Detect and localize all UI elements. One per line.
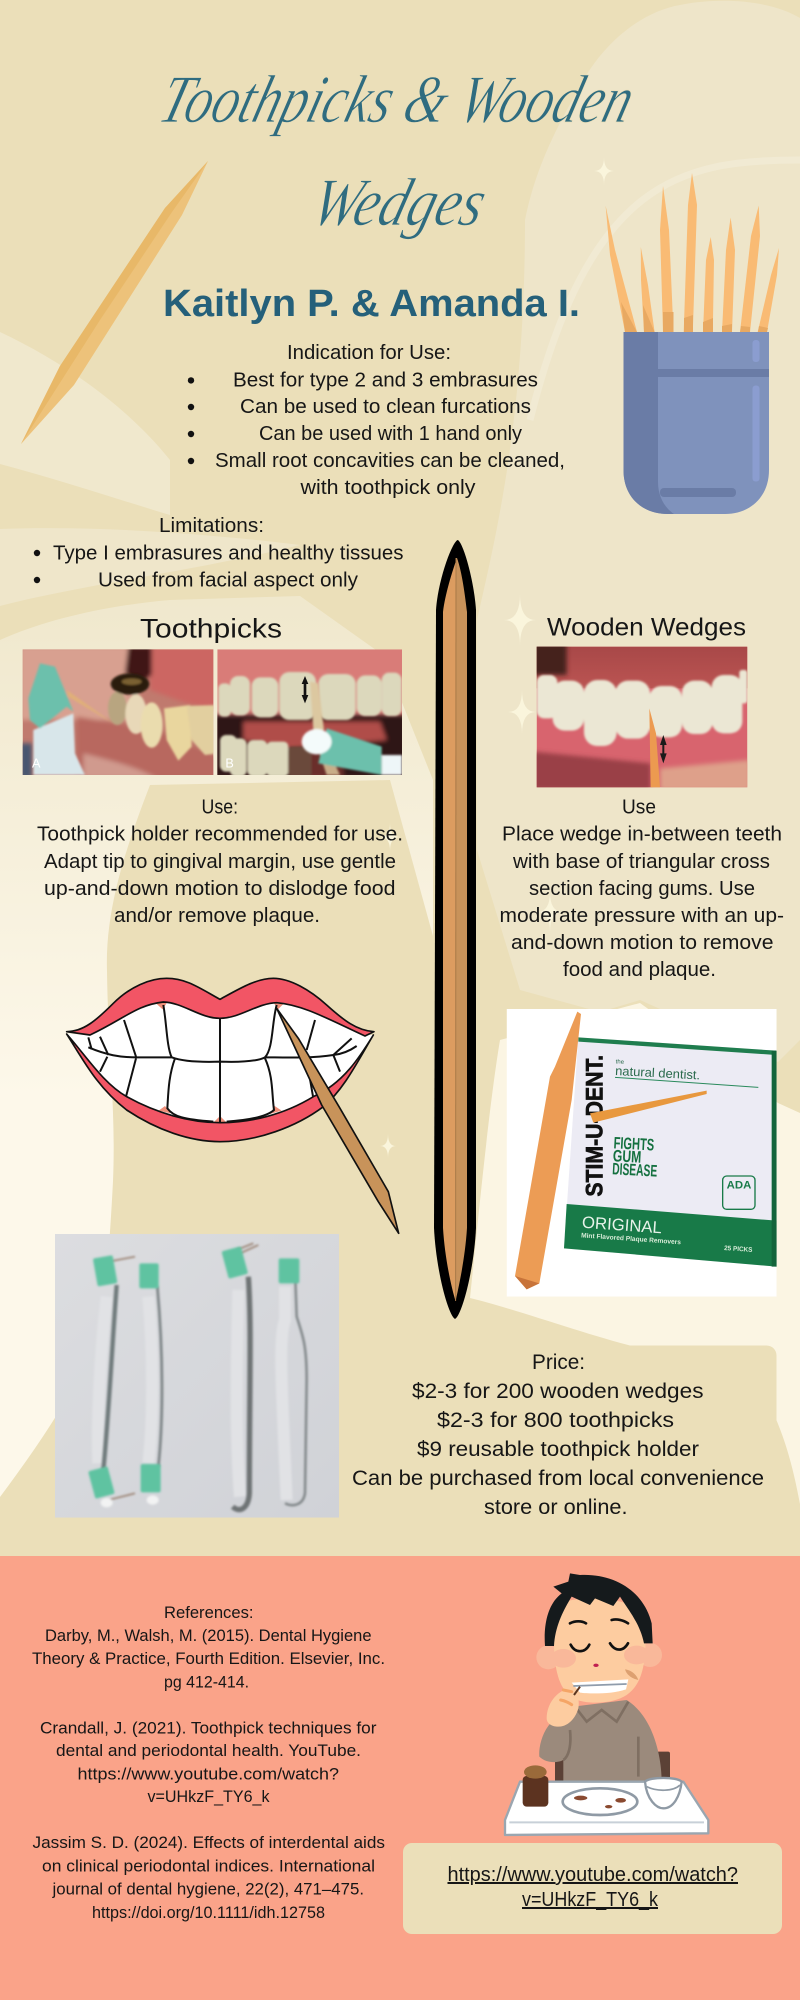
text block: references: journal of dental hygiene, 22(2), 471–475. <box>52 1880 364 1899</box>
text block: wedge use: with base of triangular cross <box>512 851 770 873</box>
text block: indication for use: Best for type 2 and 3 embrasures <box>233 369 538 391</box>
panel: video link box <box>403 1843 782 1934</box>
photo: stim-u-dent package <box>507 1009 777 1297</box>
text block: references: References: <box>164 1603 254 1622</box>
sparkles <box>380 157 708 1158</box>
photo: stim-u-dent package: ADA <box>727 1179 752 1191</box>
text block: toothpick use: Use: <box>202 796 238 818</box>
text block: references: Theory & Practice, Fourth Edition. Elsevier, Inc. <box>32 1649 385 1668</box>
photo: stim-u-dent package: DISEASE <box>612 1159 658 1181</box>
photo A: toothpick holder in mouth <box>20 647 217 778</box>
photo B: toothpick at gingival margin <box>213 649 407 778</box>
text block: references: on clinical periodontal indices. International <box>42 1856 375 1876</box>
illustration: man using a toothpick at table <box>505 1573 708 1835</box>
icon: large toothpick <box>21 161 208 444</box>
text block: toothpick use: Toothpick holder recommended for use. <box>37 824 403 846</box>
photo: stim-u-dent package: GUM <box>612 1146 642 1167</box>
text block: references: Darby, M., Walsh, M. (2015). Dental Hygiene <box>45 1626 372 1645</box>
panel: references footer <box>0 1556 800 2000</box>
text block: toothpick use: up-and-down motion to dislodge food <box>44 878 396 900</box>
title: Wedges <box>304 165 495 241</box>
photo: stim-u-dent package: ORIGINAL <box>581 1213 663 1237</box>
panel: price box: Can be purchased from local convenience <box>352 1467 764 1490</box>
authors heading: Kaitlyn P. & Amanda I. <box>163 283 580 325</box>
photo A: toothpick holder in mouth: A <box>32 756 41 770</box>
text block: indication for use: Indication for Use: <box>287 342 451 364</box>
panel: price box: $2-3 for 200 wooden wedges <box>412 1380 704 1403</box>
panel: price box: Price: <box>532 1351 585 1374</box>
text block: limitations: Limitations: <box>159 515 264 537</box>
panel: price box: $9 reusable toothpick holder <box>417 1438 699 1461</box>
text block: toothpick use: and/or remove plaque. <box>114 905 320 927</box>
panel: video link box: v=UHkzF_TY6_k <box>522 1889 659 1911</box>
panel: price box: store or online. <box>484 1496 628 1519</box>
photo: stim-u-dent package: the <box>616 1059 625 1066</box>
text block: indication for use: Small root concavities can be cleaned, <box>215 450 565 472</box>
text block: wedge use: and-down motion to remove <box>511 932 774 954</box>
title <box>152 62 643 241</box>
photo: stim-u-dent package: FIGHTS <box>613 1133 655 1154</box>
panel: price box: $2-3 for 800 toothpicks <box>437 1409 674 1432</box>
text block: references: https://www.youtube.com/watch? <box>78 1764 339 1784</box>
panel: video link box: https://www.youtube.com/watch? <box>448 1864 738 1886</box>
photo: stim-u-dent package: Mint Flavored Plaque Removers <box>581 1232 681 1246</box>
text block: indication for use: Can be used to clean furcations <box>240 396 531 418</box>
photo: toothpick holders <box>55 1234 339 1518</box>
text block: wedge use <box>500 796 784 981</box>
illustration: mouth with toothpick <box>67 978 399 1233</box>
text block: limitations: Used from facial aspect only <box>98 569 358 591</box>
text block: limitations <box>34 515 404 591</box>
text block: indication for use: Can be used with 1 hand only <box>259 423 522 445</box>
heading: wooden wedges: Wooden Wedges <box>547 614 746 642</box>
text block: indication for use <box>188 342 565 499</box>
text block: references: https://doi.org/10.1111/idh.12758 <box>92 1903 325 1922</box>
text block: references: Crandall, J. (2021). Toothpick techniques for <box>40 1718 377 1738</box>
photo: stim-u-dent package: 25 PICKS <box>724 1245 753 1254</box>
photo: wedge between lower teeth <box>533 643 750 790</box>
text block: indication for use: with toothpick only <box>299 477 476 499</box>
photo B: toothpick at gingival margin: B <box>225 756 234 770</box>
text block: references: Jassim S. D. (2024). Effects of interdental aids <box>32 1833 385 1852</box>
heading: toothpicks: Toothpicks <box>140 614 282 644</box>
photo: stim-u-dent package: STIM-U-DENT. <box>582 1055 609 1197</box>
text block: toothpick use: Adapt tip to gingival margin, use gentle <box>44 851 396 873</box>
text block: wedge use: section facing gums. Use <box>529 878 755 900</box>
central divider: wooden toothpick <box>434 540 476 1319</box>
text block: wedge use: Place wedge in-between teeth <box>502 824 782 846</box>
icon: jar of toothpicks <box>606 173 779 514</box>
text block: references <box>32 1603 385 1922</box>
text block: wedge use: Use <box>622 796 656 818</box>
text block: wedge use: food and plaque. <box>563 959 716 981</box>
title: Toothpicks & Wooden <box>152 62 643 138</box>
text block: references: dental and periodontal health. YouTube. <box>56 1741 361 1760</box>
text block: limitations: Type I embrasures and healthy tissues <box>53 542 404 564</box>
text block: references: v=UHkzF_TY6_k <box>148 1787 270 1806</box>
text block: wedge use: moderate pressure with an up- <box>500 905 784 927</box>
photo: stim-u-dent package: natural dentist. <box>615 1064 700 1082</box>
panel: price box <box>340 1346 776 1536</box>
text block: toothpick use <box>37 796 403 927</box>
text block: references: pg 412-414. <box>164 1672 249 1692</box>
